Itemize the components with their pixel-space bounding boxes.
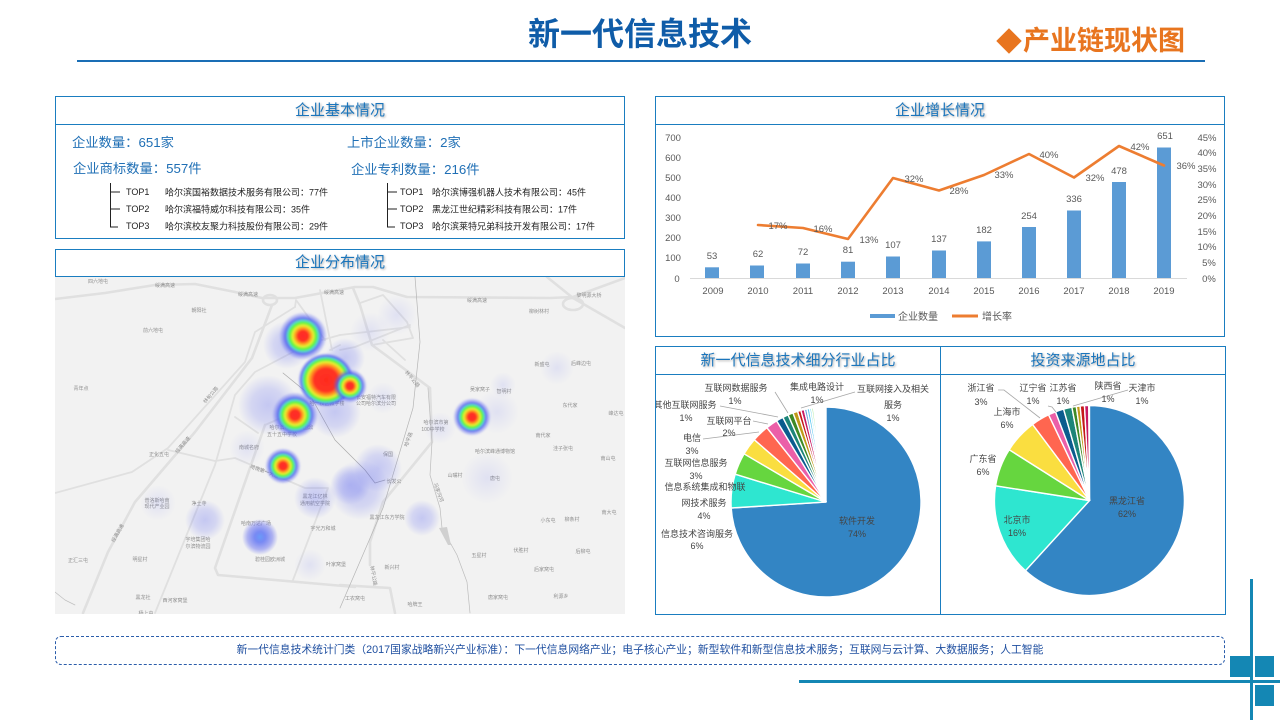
small lake: [439, 527, 451, 545]
left axis: 200: [665, 233, 681, 244]
map place labels: 绥满高速: [174, 435, 192, 455]
map place labels: 柳树林村: [529, 308, 549, 315]
map place labels: 智明村: [496, 388, 512, 395]
panel: basic company information: [55, 96, 625, 239]
bar value labels: 107: [885, 240, 901, 251]
map place labels: 南代家: [535, 432, 551, 439]
map place labels: 唐家窝屯: [488, 594, 508, 601]
year axis: 2012: [837, 286, 859, 297]
map place labels: 长发公: [386, 478, 402, 485]
growth rate labels: [768, 142, 1196, 246]
map place labels: 100中学校: [421, 426, 445, 433]
slice labels: 1%: [1135, 396, 1149, 406]
map place labels: 小东屯: [540, 517, 556, 524]
slice labels: 1%: [728, 396, 742, 406]
heat spots: [140, 295, 574, 581]
map place labels: 通用航空学院: [300, 500, 330, 507]
right axis: 40%: [1197, 148, 1217, 159]
patent top 3 list: 黑龙江世纪精彩科技有限公司：17件: [432, 204, 577, 214]
map place labels: 哈南万达广场: [241, 520, 271, 527]
slice labels: 江苏省: [1049, 382, 1077, 393]
map place labels: 新兴村: [384, 564, 400, 571]
bars: [705, 148, 1171, 278]
bar value labels: 137: [931, 234, 947, 245]
map place labels: 公司哈尔滨分公司: [356, 400, 396, 407]
title: 新一代信息技术: [528, 16, 752, 52]
left axis: 100: [665, 253, 681, 264]
leader lines: [703, 392, 855, 439]
icon: orange diamond: [996, 28, 1022, 54]
map place labels: 南山屯: [600, 455, 616, 462]
slice labels: 16%: [1008, 528, 1026, 538]
section tag text: 产业链现状图: [1023, 26, 1185, 56]
hot spot centre large: [298, 353, 354, 407]
bar value labels: 478: [1111, 166, 1127, 177]
map place labels: 青年点: [73, 385, 89, 392]
year axis: 2019: [1153, 286, 1175, 297]
heading: investment source: [941, 347, 1225, 375]
right axis: 25%: [1197, 195, 1217, 206]
pie slices: [731, 407, 921, 597]
bar value labels: 53: [707, 251, 717, 262]
heading: basic information: 企业基本情况: [295, 102, 385, 119]
map place labels: 正化五屯: [149, 451, 169, 458]
left axis: [665, 133, 681, 285]
map place labels: 四六地屯: [88, 278, 108, 285]
slice labels: 互联网平台: [706, 415, 752, 426]
trademark top 3 list: 哈尔滨国裕数据技术服务有限公司：77件: [165, 186, 328, 198]
map place labels: 黑龙江科技学院: [309, 393, 345, 400]
legend: [870, 310, 1012, 323]
hot spot east: [453, 398, 491, 436]
year axis: 2016: [1018, 286, 1040, 297]
growth rate labels: 28%: [949, 186, 969, 197]
map place labels: 中国云谷: [296, 341, 316, 348]
year axis: 2009: [702, 286, 724, 297]
blue blob south: [242, 519, 278, 555]
year axis: 2015: [973, 286, 995, 297]
growth rate labels: 40%: [1039, 150, 1059, 161]
map place labels: 哈南第一大道: [249, 463, 280, 480]
map place labels: 明星村: [132, 556, 148, 563]
pie slices: [994, 406, 1184, 595]
growth rate labels: 16%: [813, 224, 833, 235]
slice labels: 电信: [683, 432, 701, 443]
map place labels: 尔滨物流园: [185, 543, 211, 550]
left axis: 500: [665, 173, 681, 184]
growth rate labels: 13%: [859, 235, 879, 246]
slice labels: 4%: [697, 511, 711, 521]
map place labels: 正汇三屯: [68, 557, 88, 564]
map place labels: 后峰边屯: [571, 360, 591, 367]
pie chart: industry breakdown: [656, 381, 929, 596]
map place labels: 绥满高速: [110, 523, 126, 544]
slice labels: 浙江省: [967, 382, 995, 393]
slice labels: 互联网信息服务: [664, 457, 728, 468]
left axis: 0: [674, 274, 680, 285]
trademark top 3 list: 哈尔滨福特威尔科技有限公司：35件: [165, 204, 310, 214]
map place labels: 马家沟河: [432, 482, 445, 503]
left axis: 600: [665, 153, 681, 164]
legend: 增长率: [982, 310, 1012, 323]
patent top 3 list: TOP1: [400, 187, 423, 197]
growth rate labels: 42%: [1130, 142, 1150, 153]
slice labels: 互联网接入及相关: [857, 383, 929, 394]
right axis: 15%: [1197, 227, 1217, 238]
map place labels: 普洛斯哈南: [144, 497, 170, 504]
map place labels: 碧桂园欧洲城: [255, 556, 285, 563]
growth rate labels: 32%: [1085, 173, 1105, 184]
map place labels: 林平公路: [368, 565, 379, 586]
trademark top 3 list: [110, 183, 328, 232]
patent top 3 list: TOP2: [400, 204, 423, 214]
heading: investment source: 投资来源地占比: [1030, 352, 1136, 369]
heading: distribution: 企业分布情况: [295, 254, 385, 271]
hot spot west: [265, 448, 301, 484]
map place labels: 朝阳社: [191, 307, 207, 314]
right axis: 35%: [1197, 164, 1217, 175]
bar value labels: 62: [753, 249, 763, 260]
map place labels: 前六地屯: [143, 327, 163, 334]
map place labels: 唐屯: [490, 475, 500, 482]
trademark top 3 list: TOP2: [126, 204, 149, 214]
map place labels: 宇培集团哈: [185, 536, 211, 543]
map place labels: 吴家窝子: [470, 386, 490, 393]
panel: industry breakdown and investment source: [655, 346, 1226, 615]
slice labels: 服务: [884, 399, 902, 410]
map place labels: 绥满高速: [238, 291, 258, 298]
slice labels: 1%: [1056, 396, 1070, 406]
patent top 3 list: TOP3: [400, 221, 423, 231]
map place labels: 现代产业园: [144, 503, 170, 510]
section tag: industry chain status: [996, 26, 1185, 56]
map place labels: 山嘴村: [447, 472, 463, 479]
map place labels: [68, 278, 624, 617]
year axis: 2014: [928, 286, 950, 297]
heat map: [55, 277, 625, 614]
map place labels: 绥满高速: [155, 282, 175, 289]
map place labels: 南城名府: [239, 444, 259, 451]
bar value labels: 254: [1021, 211, 1037, 222]
map place labels: 哈平路: [403, 431, 414, 448]
map place labels: 黑龙江亿林: [302, 493, 328, 500]
map place labels: 绥满高速: [324, 289, 344, 296]
right axis: 5%: [1202, 258, 1216, 269]
bar value labels: 81: [843, 245, 853, 256]
map place labels: 哈牌王: [407, 601, 423, 608]
right axis: 0%: [1202, 274, 1216, 285]
slice labels: 62%: [1118, 509, 1136, 519]
slice labels: 北京市: [1003, 514, 1031, 525]
slice labels: 互联网数据服务: [704, 382, 768, 393]
map place labels: 净土寺: [191, 500, 207, 507]
right axis: 10%: [1197, 242, 1217, 253]
slice labels: 3%: [689, 471, 703, 481]
map place labels: 南大屯: [601, 509, 617, 516]
slice labels: 6%: [1000, 420, 1014, 430]
map place labels: 后家窝屯: [534, 566, 554, 573]
heading: growth: 企业增长情况: [895, 102, 985, 119]
growth rate labels: 17%: [768, 221, 788, 232]
map place labels: 峰达屯: [608, 410, 624, 417]
year axis: 2018: [1108, 286, 1130, 297]
slice labels: 6%: [976, 467, 990, 477]
map place labels: 柳条村: [564, 516, 580, 523]
slice labels: 陕西省: [1094, 380, 1122, 391]
slice labels: 1%: [1101, 394, 1115, 404]
map place labels: 黑龙江东方学院: [369, 514, 405, 521]
left axis: 400: [665, 193, 681, 204]
map place labels: 哈一校区教学楼: [309, 400, 345, 407]
map place labels: 工农窝屯: [345, 595, 365, 602]
right axis: [1197, 133, 1217, 285]
map place labels: 国鼎: [303, 424, 313, 431]
slice labels: 3%: [974, 397, 988, 407]
slice labels: [653, 381, 929, 551]
slice labels: 集成电路设计: [790, 381, 844, 392]
footnote: classification statement: 新一代信息技术统计门类（2017国家战略新兴产业标准）：下一代信息网络产业；电子核心产业；新型软件和新型信息技术服务；互联网与云计算、大数据服务；人工智能: [237, 644, 1043, 656]
map place labels: 黎明源大桥: [576, 292, 602, 299]
slice labels: 1%: [679, 413, 693, 423]
map place labels: 林甸公路: [202, 385, 220, 405]
slice labels: 6%: [690, 541, 704, 551]
bar value labels: 182: [976, 225, 992, 236]
patent top 3 list: 哈尔滨莱特兄弟科技开发有限公司：17件: [432, 220, 595, 232]
right axis: 30%: [1197, 180, 1217, 191]
hot spot middle: [272, 392, 318, 438]
growth rate labels: 32%: [904, 174, 924, 185]
left axis: 700: [665, 133, 681, 144]
key figures: 企业专利数量：216件: [351, 161, 480, 177]
slice labels: 1%: [810, 395, 824, 405]
slice labels: 黑龙江省: [1109, 495, 1145, 506]
map place labels: 洼子张屯: [553, 445, 573, 452]
map place labels: 哈尔滨市第: [423, 419, 449, 426]
map place labels: 东代家: [562, 402, 578, 409]
slice labels: 2%: [722, 428, 736, 438]
bar value labels: 72: [798, 247, 808, 258]
key figures: 企业数量：651家: [72, 134, 174, 150]
patent top 3 list: [388, 183, 595, 232]
bar value labels: [707, 131, 1173, 262]
legend: 企业数量: [898, 310, 938, 323]
slice labels: 辽宁省: [1019, 382, 1047, 393]
map place labels: 利源乡: [553, 593, 569, 600]
map place labels: 西河家窝堡: [162, 597, 188, 604]
map place labels: 新盛屯: [534, 361, 550, 368]
pie chart: investment source: [967, 380, 1184, 595]
slice labels: 信息系统集成和物联: [664, 481, 746, 492]
corner decoration: [799, 579, 1280, 720]
slice labels: 网技术服务: [681, 497, 727, 508]
slice labels: [967, 380, 1156, 538]
slice labels: 广东省: [969, 453, 997, 464]
bar value labels: 651: [1157, 131, 1173, 142]
map place labels: 黑龙社: [135, 594, 151, 601]
hot spot north: [279, 312, 327, 360]
year axis: 2017: [1063, 286, 1085, 297]
panel: company distribution heading: [55, 249, 625, 277]
map place labels: 五十五中学校: [267, 431, 297, 438]
heading: industry breakdown: [656, 347, 941, 375]
slice labels: 1%: [886, 413, 900, 423]
left axis: 300: [665, 213, 681, 224]
pale density blobs: [140, 295, 574, 581]
leader lines: [998, 390, 1128, 418]
footnote: classification statement: [55, 636, 1225, 665]
map place labels: 后柳屯: [575, 548, 591, 555]
year axis: 2010: [747, 286, 769, 297]
map place labels: 绥满高速: [467, 297, 487, 304]
combo chart: company count and growth rate: [665, 131, 1217, 323]
panel: company growth: [655, 96, 1225, 337]
map place labels: 五星村: [471, 552, 487, 559]
year axis: 2013: [882, 286, 904, 297]
map roads: [55, 277, 625, 613]
map place labels: 伏胜村: [513, 547, 529, 554]
slice labels: 信息技术咨询服务: [661, 528, 733, 539]
heading: industry breakdown: 新一代信息技术细分行业占比: [700, 352, 896, 369]
slice labels: 3%: [685, 446, 699, 456]
slice labels: 上海市: [993, 406, 1021, 417]
map place labels: 林平公路: [403, 369, 421, 389]
map place labels: 哈尔滨市第: [269, 424, 295, 431]
right axis: 20%: [1197, 211, 1217, 222]
patent top 3 list: 哈尔滨博强机器人技术有限公司：45件: [432, 186, 586, 198]
growth rate line: [758, 146, 1164, 239]
slice labels: 1%: [1026, 396, 1040, 406]
key figures: [72, 134, 480, 177]
slice labels: 天津市: [1128, 382, 1156, 393]
hot spot centre small: [333, 369, 367, 403]
map place labels: 长安福特汽车有限: [356, 394, 396, 401]
trademark top 3 list: 哈尔滨校友聚力科技股份有限公司：29件: [165, 220, 328, 232]
trademark top 3 list: TOP1: [126, 187, 149, 197]
growth rate labels: 36%: [1176, 161, 1196, 172]
slice labels: 软件开发: [839, 515, 875, 526]
map place labels: 叶家窝堡: [326, 561, 346, 568]
growth rate labels: 33%: [994, 170, 1014, 181]
statistics and top company lists: [72, 134, 595, 232]
slice labels: 74%: [848, 529, 866, 539]
map place labels: 保国: [383, 451, 393, 458]
year axis: 2011: [793, 286, 813, 297]
heading: basic information: [56, 97, 624, 125]
heading: growth: [656, 97, 1224, 125]
key figures: 上市企业数量：2家: [347, 134, 461, 150]
map place labels: 宇光万和城: [310, 525, 336, 532]
key figures: 企业商标数量：557件: [73, 160, 202, 176]
right axis: 45%: [1197, 133, 1217, 144]
trademark top 3 list: TOP3: [126, 221, 149, 231]
year axis: [702, 286, 1175, 297]
map place labels: 哈尔滨峰通博物馆: [475, 448, 515, 455]
bar value labels: 336: [1066, 194, 1082, 205]
